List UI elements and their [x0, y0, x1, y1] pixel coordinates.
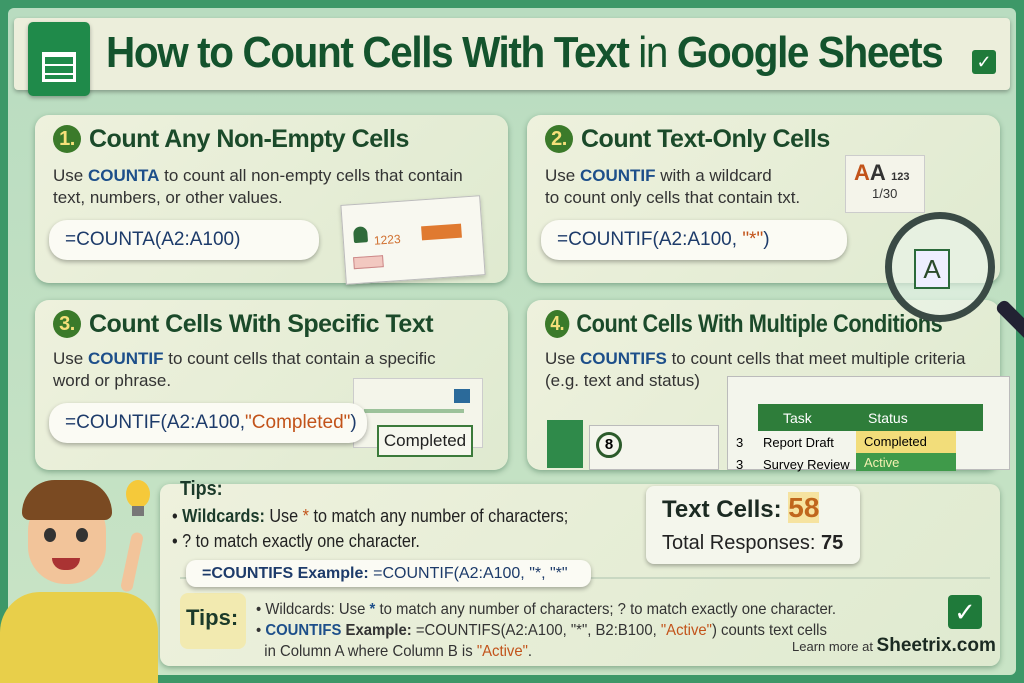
tips label: Tips:: [186, 605, 238, 630]
table: task status: Active: [864, 455, 899, 470]
tips text: [256, 601, 836, 660]
text 3: [53, 349, 436, 390]
heading 3: 3.: [59, 313, 75, 335]
text 3: Use COUNTIF to count cells that contain a specific: [53, 349, 436, 368]
table: task status: Report Draft: [763, 435, 834, 450]
shirt: [0, 592, 158, 683]
tips text: • Wildcards: Use * to match any number of characters; ? to match exactly one character.: [256, 601, 836, 618]
illustration: A 123 card: [845, 155, 925, 213]
eyes: [44, 528, 56, 542]
hand: [120, 531, 144, 593]
face: [28, 492, 106, 584]
stats card: [646, 486, 860, 564]
illustration: sheet card: [340, 195, 486, 285]
table: task status: [727, 376, 1010, 470]
callout: Completed: Completed: [384, 431, 466, 450]
text 1: [53, 166, 463, 207]
panel: 4 multiple conditions: [527, 300, 1000, 470]
tips list: • Wildcards: Use * to match any number of characters;: [172, 506, 568, 526]
title: How to Count Cells With Text in Google Sheets: [106, 28, 942, 77]
text 3: word or phrase.: [53, 371, 171, 390]
panel: 2 count text-only: [527, 115, 1000, 283]
illustration: card: 8: [605, 436, 613, 453]
heading 2: Count Text-Only Cells: [581, 125, 830, 153]
formula 1: [49, 220, 319, 260]
icon: magnifying glass: A: [923, 254, 941, 284]
stats card: Total Responses: 75: [662, 532, 843, 554]
heading 1: Count Any Non-Empty Cells: [89, 125, 409, 153]
text 2: Use COUNTIF with a wildcard: [545, 166, 772, 185]
lightbulb: [126, 480, 150, 508]
illustration: card: [589, 425, 719, 470]
hair: [22, 480, 112, 520]
text 4: (e.g. text and status): [545, 371, 700, 390]
tips list: [172, 506, 568, 551]
illustration: A 123 card: 1/30: [872, 186, 897, 201]
text 4: Use COUNTIFS to count cells that meet multiple criteria: [545, 349, 965, 368]
callout: Completed: [377, 425, 473, 457]
illustration: sheet with checkbox: [353, 378, 483, 448]
illustration: sheet card: 1223: [373, 232, 401, 248]
icon: checkbox: [948, 595, 982, 629]
icon: checkbox: ✓: [976, 52, 992, 72]
heading 1: 1.: [59, 128, 75, 150]
tips text: in Column A where Column B is "Active".: [264, 643, 532, 660]
table: task status: Completed: [864, 434, 927, 449]
tips list: • ? to match exactly one character.: [172, 531, 420, 551]
heading 2: 2.: [551, 128, 567, 150]
panel: 1 count any non-empty: [35, 115, 508, 283]
table: task status: Task: [783, 410, 812, 426]
text 4: [545, 349, 966, 390]
icon: sheets logo: [28, 22, 90, 96]
table: task status: 3: [736, 435, 743, 450]
formula 1: =COUNTA(A2:A100): [65, 229, 240, 250]
character: boy pointing: [0, 480, 158, 683]
icon: checkbox: [972, 50, 996, 74]
formula 2: [541, 220, 847, 260]
text 1: text, numbers, or other values.: [53, 188, 283, 207]
tips heading: Tips:: [180, 478, 223, 500]
heading 3: Count Cells With Specific Text: [89, 310, 433, 338]
formula 2: =COUNTIF(A2:A100, "*"): [557, 229, 770, 250]
text 2: [545, 166, 800, 207]
text 2: to count only cells that contain txt.: [545, 188, 800, 207]
tips label: [180, 593, 246, 649]
formula 3: =COUNTIF(A2:A100,"Completed"): [65, 412, 357, 433]
icon: magnifying glass: [885, 212, 995, 322]
stats card: Text Cells: 58: [662, 492, 819, 523]
example formula: =COUNTIFS Example: =COUNTIF(A2:A100, "*, "*": [202, 565, 568, 582]
example formula: [186, 560, 591, 587]
table: task status: 3: [736, 457, 743, 472]
table: task status: Status: [868, 410, 908, 426]
tips box bottom: [180, 577, 990, 662]
table: task status: Survey Review: [763, 457, 850, 472]
formula 3: [49, 403, 367, 443]
illustration: sheet icon: [547, 420, 583, 468]
text 1: Use COUNTA to count all non-empty cells that contain: [53, 166, 463, 185]
icon: checkbox: ✓: [954, 597, 976, 627]
title bar: [14, 18, 1010, 90]
illustration: A 123 card: AA 123: [854, 160, 909, 185]
tips text: • COUNTIFS Example: =COUNTIFS(A2:A100, "*", B2:B100, "Active") counts text cells: [256, 622, 827, 639]
panel: tips: [160, 484, 1000, 666]
heading 4: 4.: [550, 313, 564, 335]
panel: 3 specific text: [35, 300, 508, 470]
mouth: [52, 558, 80, 570]
heading 4: Count Cells With Multiple Conditions: [576, 310, 942, 338]
credit: Learn more at Sheetrix.com: [792, 635, 996, 656]
